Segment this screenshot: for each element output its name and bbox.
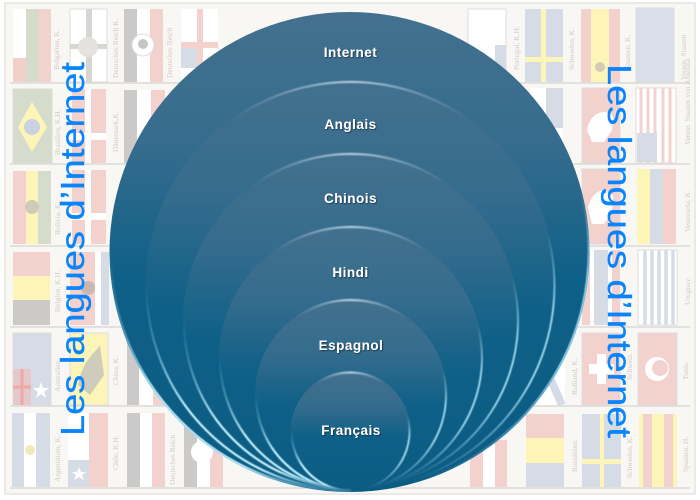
flag captions: Deutsches Reich: [165, 28, 174, 78]
flag captions: Tunis.: [681, 361, 690, 380]
circle: Hindi: Hindi: [332, 265, 369, 280]
circle: Internet: Internet: [324, 45, 377, 60]
circle: Anglais: Anglais: [324, 117, 377, 132]
flag captions: Spanien, K.: [623, 35, 632, 70]
flag captions: Argentinien, K.: [53, 435, 62, 482]
flag captions: Portugal, K.H.: [512, 26, 521, 70]
circle: Français: Français: [321, 423, 381, 438]
flag captions: Deutsches Reich: [168, 435, 177, 485]
circle: Anglais: [146, 81, 556, 491]
circle: Chinois: [183, 153, 519, 489]
flag captions: Dänemark,K.: [111, 111, 120, 152]
circle: Espagnol: [255, 299, 447, 491]
circle: Espagnol: Espagnol: [319, 338, 383, 353]
flag row 1: [13, 8, 674, 82]
flag row 4: [13, 250, 677, 325]
circle: Chinois: Chinois: [324, 191, 377, 206]
flag row 6: [12, 413, 677, 487]
flag captions: Belgien, K.H.: [53, 270, 62, 312]
flag captions: Bulgarien, K.: [52, 29, 61, 70]
stacked circles diagram: [110, 12, 590, 492]
flag row 2: [13, 88, 676, 163]
flag captions: Schweden, K.: [567, 28, 576, 70]
flag captions: China, K.: [111, 356, 120, 385]
flag captions: Verein. Staaten: [679, 34, 688, 80]
flag captions: Verein. Staaten von Amerika.: [683, 57, 692, 145]
flag captions: Australien.: [53, 359, 62, 392]
flag row 5: [13, 333, 677, 405]
circle: Hindi: [219, 226, 483, 490]
flag captions: Rußland, K.: [570, 358, 579, 395]
flag captions: Spanien, H.: [681, 437, 690, 472]
flag captions: Bolivia, K.: [53, 202, 62, 235]
flag captions: Venezuela, K.: [683, 190, 692, 232]
flag captions: Deutsches Reich K.: [111, 19, 120, 78]
flag row 3: [13, 169, 676, 244]
flag captions: Uruguay.: [683, 277, 692, 305]
flag captions: Brasilien, K.H.: [53, 109, 62, 155]
right vertical title: Les langues d’Internet: [600, 64, 637, 439]
flag captions: Schweiz.: [625, 353, 634, 380]
flag captions: Schweden, K.: [625, 436, 634, 478]
flag captions: Rumänien.: [570, 439, 579, 472]
circle: Français: [290, 372, 410, 492]
flag captions: Chile, K.H.: [111, 435, 120, 470]
left vertical title: Les langues d’Internet: [55, 61, 92, 436]
circle: Internet: [110, 12, 590, 492]
